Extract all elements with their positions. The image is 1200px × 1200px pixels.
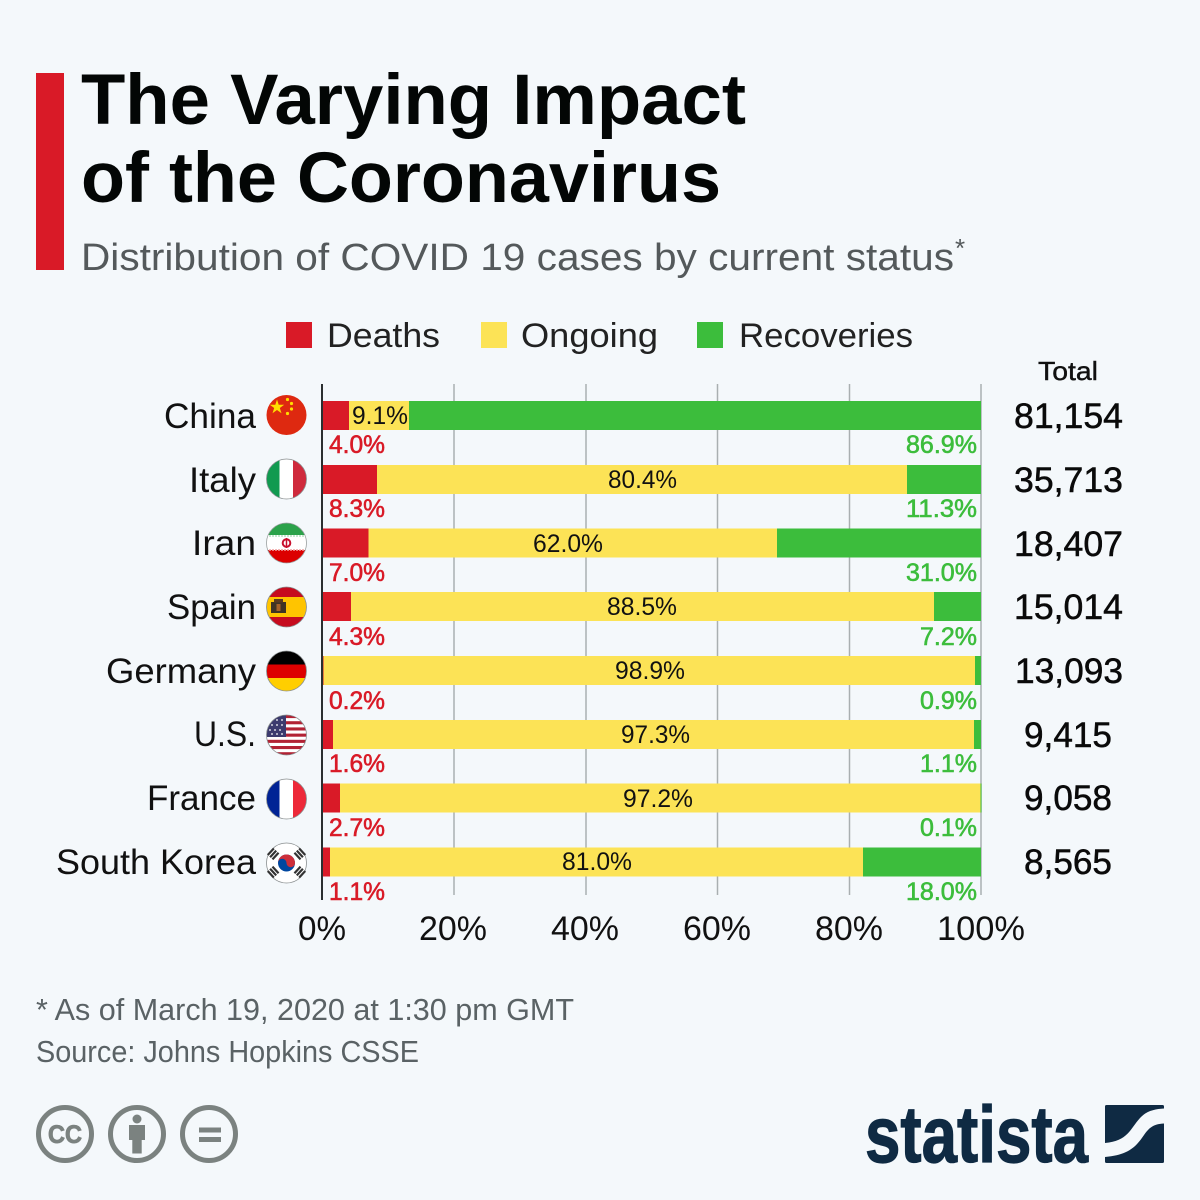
row: Italy: 11.3% xyxy=(906,495,977,523)
subtitle: * xyxy=(955,233,965,263)
footnote and source: Source: Johns Hopkins CSSE xyxy=(36,1034,419,1069)
legend: Ongoing xyxy=(521,317,658,355)
row: South Korea: South Korea xyxy=(56,843,257,882)
footnote and source: * As of March 19, 2020 at 1:30 pm GMT xyxy=(36,992,574,1027)
row: South Korea xyxy=(56,843,1112,906)
row: China: 86.9% xyxy=(906,431,977,459)
row: Italy: 8.3% xyxy=(329,495,385,523)
chart grid lines xyxy=(454,384,981,895)
row: France: 2.7% xyxy=(329,814,385,842)
row: U.S.: U.S. xyxy=(194,715,256,754)
row: China: 4.0% xyxy=(329,431,385,459)
row: U.S. xyxy=(194,715,1112,778)
row: Germany: 0.2% xyxy=(329,687,385,715)
row: Spain: 15,014 xyxy=(1014,588,1123,627)
row: France: 97.2% xyxy=(623,785,693,813)
row: U.S.: 97.3% xyxy=(621,721,690,749)
legend: Deaths xyxy=(327,317,440,355)
row: Iran: 7.0% xyxy=(329,559,385,587)
vertical axis line xyxy=(321,384,323,900)
row: South Korea: 8,565 xyxy=(1024,843,1112,882)
row: Italy: Italy xyxy=(189,461,257,500)
icon: no derivatives xyxy=(182,1108,236,1160)
row: Iran: 62.0% xyxy=(533,530,603,558)
title xyxy=(81,61,746,218)
legend xyxy=(286,317,913,355)
row: U.S.: 9,415 xyxy=(1024,716,1112,755)
row: China: 81,154 xyxy=(1014,397,1123,436)
row: Germany: 98.9% xyxy=(615,657,685,685)
row: France xyxy=(147,779,1112,842)
title accent bar xyxy=(36,73,64,270)
row: China: 9.1% xyxy=(352,402,408,430)
x axis labels: 80% xyxy=(815,910,883,948)
row: France: 0.1% xyxy=(920,814,977,842)
row: Iran: 18,407 xyxy=(1014,525,1123,564)
x axis labels: 100% xyxy=(937,910,1025,948)
icon: creative commons xyxy=(38,1108,92,1160)
row: Iran xyxy=(192,523,1123,587)
row: Iran: 31.0% xyxy=(906,559,977,587)
row: Spain: 4.3% xyxy=(329,623,385,651)
total column heading: Total xyxy=(1038,356,1098,386)
title: The Varying Impact xyxy=(81,61,746,140)
row: Spain: Spain xyxy=(167,588,256,627)
legend: Recoveries xyxy=(739,317,913,355)
row: Iran: Iran xyxy=(192,524,256,563)
icon: creative commons: CC xyxy=(48,1121,82,1149)
row: South Korea: 18.0% xyxy=(906,878,977,906)
row: U.S.: 1.1% xyxy=(920,750,977,778)
row: China: China xyxy=(164,397,257,436)
row: Spain: 88.5% xyxy=(607,593,677,621)
row: France: 9,058 xyxy=(1024,779,1112,818)
row: Italy: 35,713 xyxy=(1014,461,1123,500)
row: U.S.: 1.6% xyxy=(329,750,385,778)
row: Germany xyxy=(106,651,1123,715)
row: Spain xyxy=(167,587,1123,651)
statista logo mark xyxy=(1105,1105,1164,1163)
row: Germany: 13,093 xyxy=(1015,652,1123,691)
x axis labels xyxy=(298,910,1025,948)
x axis labels: 40% xyxy=(551,910,619,948)
subtitle: Distribution of COVID 19 cases by current status xyxy=(81,237,954,279)
row: Italy: 80.4% xyxy=(608,466,677,494)
row: South Korea: 81.0% xyxy=(562,848,632,876)
statista wordmark: statista xyxy=(865,1090,1088,1179)
icon: attribution xyxy=(110,1108,164,1160)
row: France: France xyxy=(147,779,256,818)
row: China xyxy=(164,395,1123,459)
x axis labels: 20% xyxy=(419,910,487,948)
x axis labels: 0% xyxy=(298,910,346,948)
row: Spain: 7.2% xyxy=(920,623,977,651)
footnote and source xyxy=(36,992,574,1069)
row: Germany: 0.9% xyxy=(920,687,977,715)
row: South Korea: 1.1% xyxy=(329,878,385,906)
row: Italy xyxy=(189,459,1123,523)
title: of the Coronavirus xyxy=(81,139,721,218)
x axis labels: 60% xyxy=(683,910,751,948)
row: Germany: Germany xyxy=(106,652,257,691)
